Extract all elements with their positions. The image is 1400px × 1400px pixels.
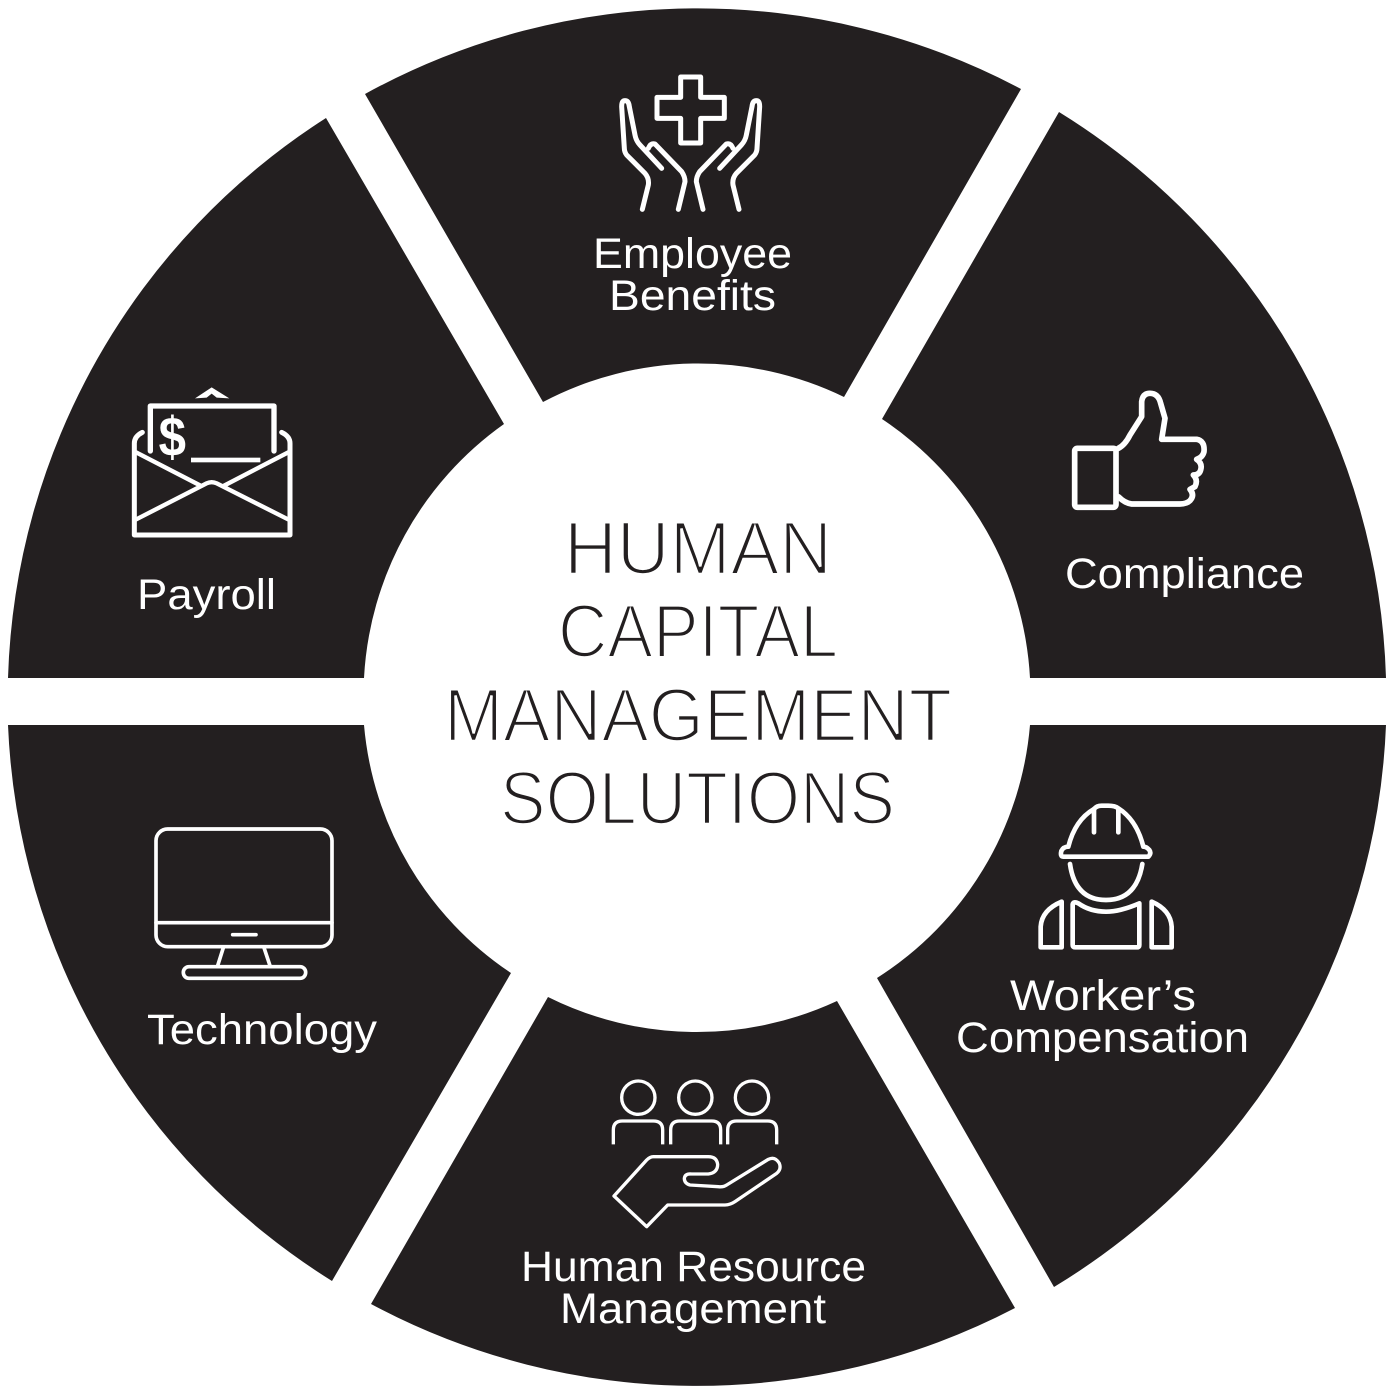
panel: technology bbox=[8, 725, 511, 1281]
panel: employee benefits bbox=[365, 8, 1021, 402]
icon: envelope with pay cheque: $ bbox=[159, 405, 186, 468]
label: technology: Technology bbox=[147, 1006, 378, 1054]
icon: people above open hand bbox=[613, 1081, 780, 1227]
center title: CAPITAL bbox=[558, 589, 838, 673]
segment: payroll bbox=[8, 118, 504, 678]
label: human resource management: Human Resource bbox=[521, 1243, 866, 1291]
label: worker's compensation: Compensation bbox=[956, 1014, 1249, 1062]
panel: compliance bbox=[882, 112, 1386, 678]
icon: thumbs up bbox=[1075, 393, 1204, 507]
label: employee benefits: Employee bbox=[593, 230, 792, 278]
segment: worker's compensation bbox=[877, 725, 1386, 1287]
center title: MANAGEMENT bbox=[444, 673, 952, 757]
segment: compliance bbox=[882, 112, 1386, 678]
panel: payroll bbox=[8, 118, 504, 678]
icon: envelope with pay cheque bbox=[134, 387, 290, 535]
panel: worker's compensation bbox=[877, 725, 1386, 1287]
segment: technology bbox=[8, 725, 511, 1281]
label: payroll: Payroll bbox=[137, 571, 276, 619]
label: employee benefits: Benefits bbox=[609, 272, 776, 320]
segment: employee benefits bbox=[365, 8, 1021, 402]
center title: SOLUTIONS bbox=[500, 756, 895, 840]
panel: human resource management bbox=[371, 997, 1015, 1386]
label: worker's compensation: Worker’s bbox=[1010, 972, 1196, 1020]
label: human resource management: Management bbox=[560, 1285, 826, 1333]
icon: worker in hard hat bbox=[1041, 806, 1172, 947]
label: compliance: Compliance bbox=[1065, 550, 1304, 598]
center title: HUMAN bbox=[564, 506, 832, 590]
segment: human resource management bbox=[371, 997, 1015, 1386]
icon: desktop monitor bbox=[156, 829, 332, 978]
icon: hands holding medical cross bbox=[622, 77, 760, 209]
